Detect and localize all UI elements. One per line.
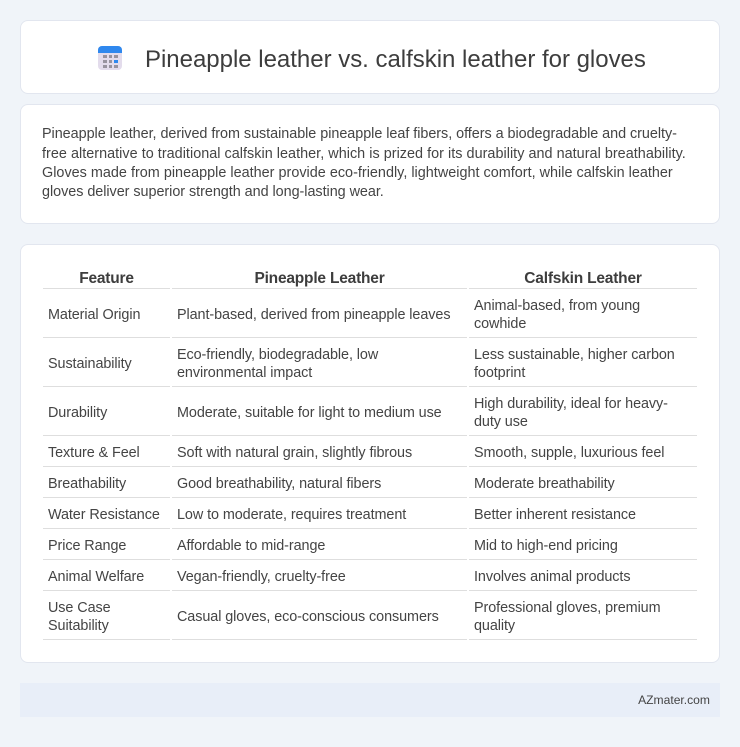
row: Texture & Feel: Soft with natural grain, slightly fibrous: [177, 445, 412, 461]
row: Water Resistance: [48, 507, 636, 523]
row: Animal Welfare: Involves animal products: [474, 569, 630, 585]
row: Use Case Suitability: quality: [474, 618, 515, 634]
row: Animal Welfare: Animal Welfare: [48, 569, 144, 585]
row: Material Origin: Plant-based, derived from pineapple leaves: [177, 307, 450, 323]
row: Sustainability: footprint: [474, 365, 525, 381]
row: Texture & Feel: Smooth, supple, luxurious feel: [474, 445, 664, 461]
row: Sustainability: Eco-friendly, biodegradable, low: [177, 347, 378, 363]
footer bar: [20, 683, 720, 717]
row: Sustainability: Sustainability: [48, 356, 132, 372]
table header: Pineapple Leather: [254, 270, 385, 287]
panel: title card: [20, 20, 720, 94]
row: Breathability: Moderate breathability: [474, 476, 615, 492]
row: Sustainability: [48, 347, 675, 381]
text block: introduction: Pineapple leather, derived from sustainable pineapple leaf fibers, offers a biodegradable and cruelty-: [42, 126, 677, 142]
row: Water Resistance: Water Resistance: [48, 507, 160, 523]
row: Durability: Durability: [48, 405, 107, 421]
row: Durability: Moderate, suitable for light to medium use: [177, 405, 442, 421]
row: Animal Welfare: [48, 569, 630, 585]
row: Use Case Suitability: Suitability: [48, 618, 109, 634]
row: Material Origin: cowhide: [474, 316, 526, 332]
text block: introduction: Gloves made from pineapple leather provide eco-friendly, lightweight comfort, while calfskin leather: [42, 165, 673, 181]
table header: [79, 270, 642, 287]
row: Water Resistance: Low to moderate, requires treatment: [177, 507, 406, 523]
row: Breathability: Good breathability, natural fibers: [177, 476, 381, 492]
text block: introduction: gloves deliver superior strength and long-lasting wear.: [42, 184, 384, 200]
row: Animal Welfare: Vegan-friendly, cruelty-free: [177, 569, 346, 585]
row: Material Origin: Material Origin: [48, 307, 140, 323]
title: Pineapple leather vs. calfskin leather for gloves: [145, 46, 646, 73]
row: Use Case Suitability: Casual gloves, eco-conscious consumers: [177, 609, 439, 625]
row: Price Range: Affordable to mid-range: [177, 538, 325, 554]
row: Sustainability: Less sustainable, higher carbon: [474, 347, 675, 363]
row: Material Origin: [48, 298, 640, 332]
comparison table: [43, 270, 697, 640]
row: Use Case Suitability: Professional gloves, premium: [474, 600, 661, 616]
row: Breathability: Breathability: [48, 476, 126, 492]
row: Water Resistance: Better inherent resistance: [474, 507, 636, 523]
panel: introduction: [20, 104, 720, 224]
table header: Feature: [79, 270, 134, 287]
row: Use Case Suitability: [48, 600, 661, 634]
row: Sustainability: environmental impact: [177, 365, 312, 381]
footer credit: AZmater.com: [638, 693, 710, 707]
row: Use Case Suitability: Use Case: [48, 600, 111, 616]
row: Price Range: Mid to high-end pricing: [474, 538, 618, 554]
row: Durability: High durability, ideal for heavy-: [474, 396, 668, 412]
row: Texture & Feel: [48, 445, 664, 461]
row: Material Origin: Animal-based, from young: [474, 298, 640, 314]
row: Texture & Feel: Texture & Feel: [48, 445, 140, 461]
row: Price Range: Price Range: [48, 538, 126, 554]
row: Durability: [48, 396, 668, 430]
table header: Calfskin Leather: [524, 270, 642, 287]
row: Breathability: [48, 476, 615, 492]
text block: introduction: free alternative to traditional calfskin leather, which is prized for its durability and natural breathability.: [42, 146, 686, 162]
text block: introduction: [42, 126, 686, 200]
icon: calendar: [98, 46, 122, 70]
row: Price Range: [48, 538, 618, 554]
row: Durability: duty use: [474, 414, 528, 430]
panel: comparison table: [20, 244, 720, 663]
